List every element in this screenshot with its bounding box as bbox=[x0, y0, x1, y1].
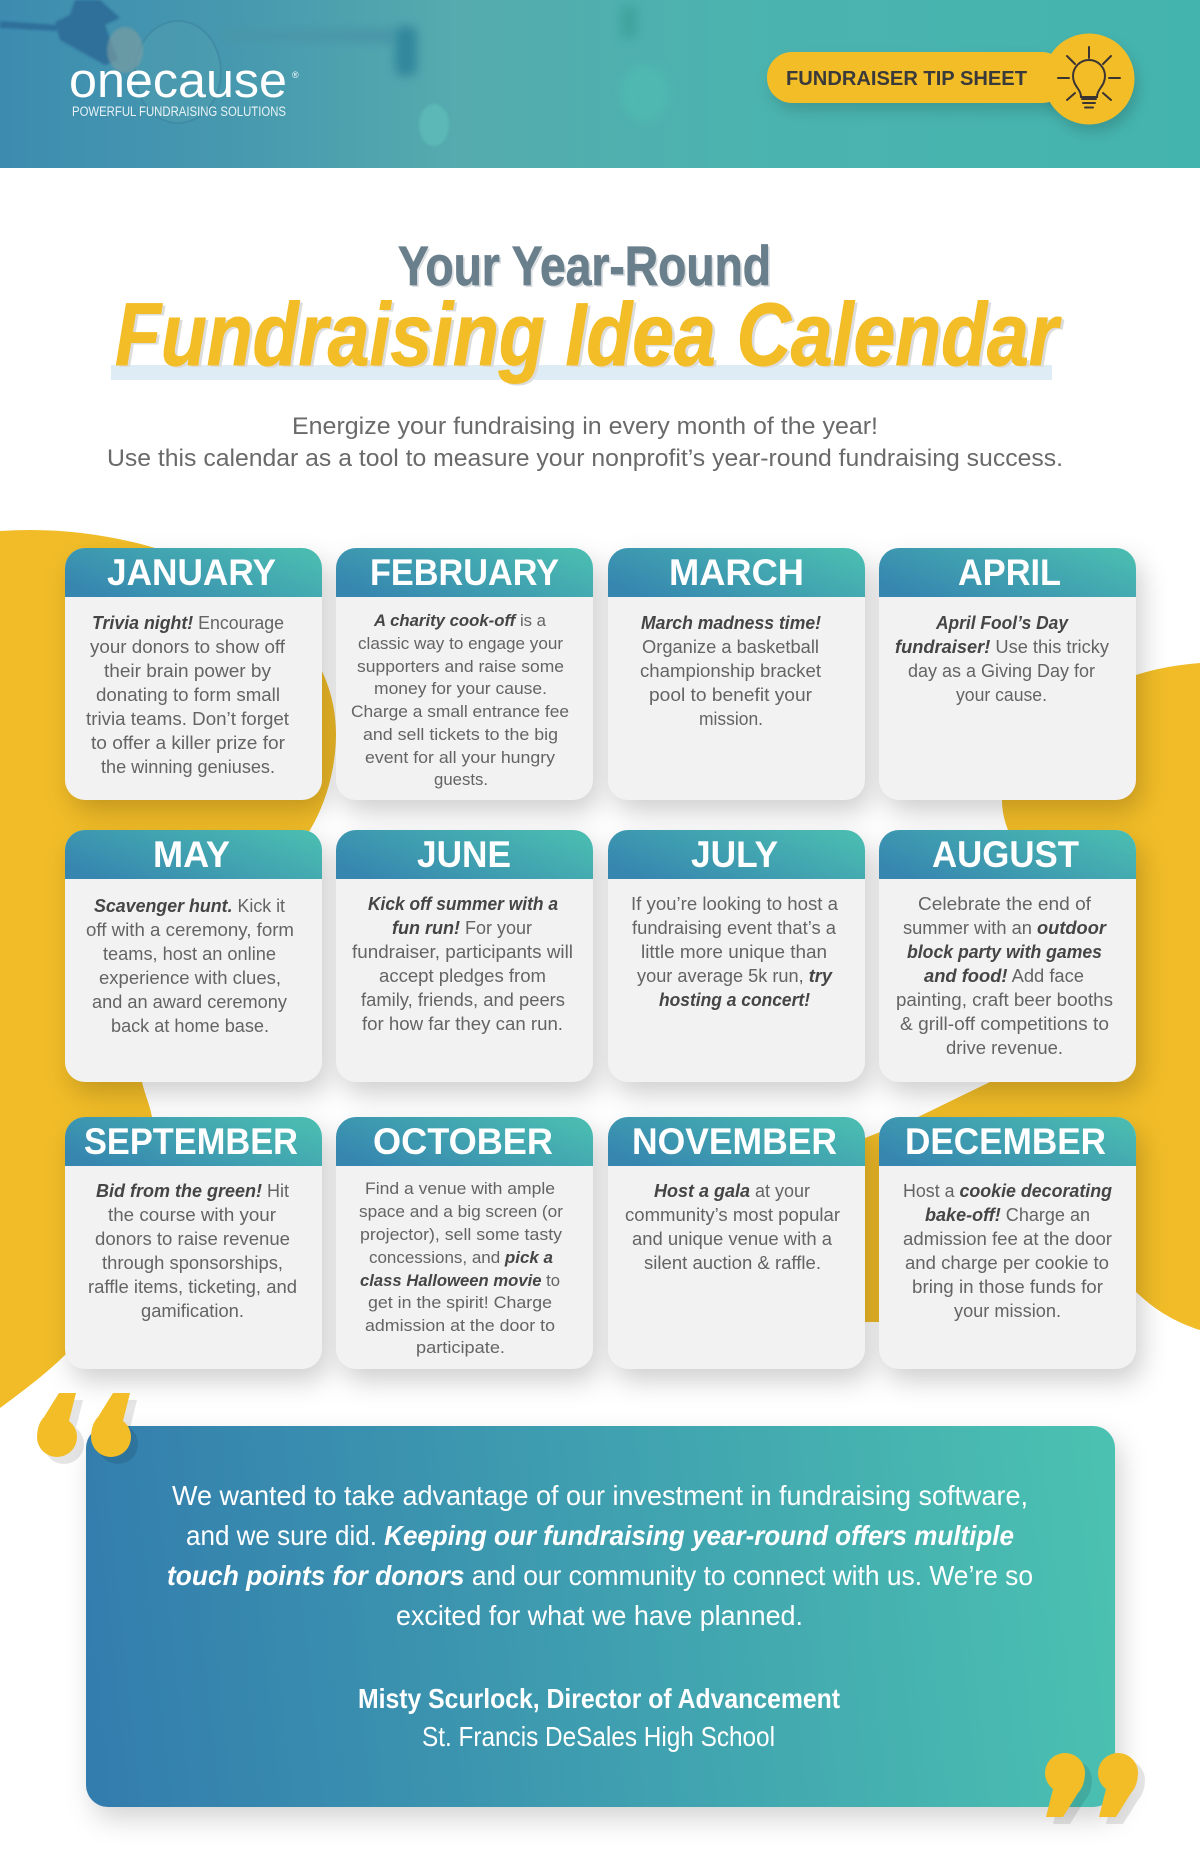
text: October idea: projector), sell some tasty bbox=[360, 1225, 563, 1244]
text: February idea bbox=[351, 611, 569, 789]
text: October idea: admission at the door to bbox=[365, 1316, 555, 1335]
quote body: touch points for donors and our community to connect with us. We’re so bbox=[167, 1560, 1033, 1591]
text: August idea: block party with games bbox=[907, 942, 1102, 962]
text: August idea: drive revenue. bbox=[946, 1038, 1063, 1058]
text: August idea: summer with an outdoor bbox=[903, 918, 1107, 938]
text: August idea bbox=[896, 894, 1113, 1058]
intro text bbox=[107, 413, 1063, 472]
text: March idea: championship bracket bbox=[640, 661, 821, 681]
text: October idea bbox=[359, 1179, 563, 1357]
text: December idea: and charge per cookie to bbox=[905, 1253, 1109, 1273]
month header: August bbox=[879, 830, 1136, 879]
month header: July bbox=[608, 830, 865, 879]
icon: opening quote marks bbox=[37, 1393, 138, 1464]
text: January idea: their brain power by bbox=[104, 661, 271, 681]
text: March idea: March madness time! bbox=[641, 613, 821, 633]
month header: December: DECEMBER bbox=[905, 1121, 1106, 1162]
quote body bbox=[167, 1480, 1033, 1631]
text: October idea: Find a venue with ample bbox=[365, 1179, 555, 1198]
text: February idea: money for your cause. bbox=[374, 679, 547, 698]
text: February idea: A charity cook-off is a bbox=[373, 611, 547, 630]
text: June idea: fun run! For your bbox=[392, 918, 532, 938]
text: October idea: class Halloween movie to bbox=[360, 1271, 560, 1290]
text: January idea: donating to form small bbox=[96, 685, 280, 705]
month header: February: FEBRUARY bbox=[370, 552, 559, 593]
text: September idea: Bid from the green! Hit bbox=[96, 1181, 289, 1201]
text: December idea: bake-off! Charge an bbox=[925, 1205, 1090, 1225]
text: January idea: the winning geniuses. bbox=[101, 757, 275, 777]
panel: September bbox=[65, 1117, 322, 1369]
text: October idea: get in the spirit! Charge bbox=[368, 1293, 552, 1312]
panel: August bbox=[879, 830, 1136, 1082]
text: January idea: Trivia night! Encourage bbox=[92, 613, 284, 633]
month header: November: NOVEMBER bbox=[632, 1121, 837, 1162]
quote body: excited for what we have planned. bbox=[396, 1600, 803, 1631]
text: September idea: gamification. bbox=[141, 1301, 244, 1321]
month header: January: JANUARY bbox=[107, 552, 276, 593]
panel: January bbox=[65, 548, 322, 800]
text: April idea: fundraiser! Use this tricky bbox=[895, 637, 1109, 657]
month header: January bbox=[65, 548, 322, 597]
text: May idea: off with a ceremony, form bbox=[86, 920, 294, 940]
month header: May bbox=[65, 830, 322, 879]
text: January idea: your donors to show off bbox=[90, 637, 286, 657]
text: September idea: through sponsorships, bbox=[102, 1253, 283, 1273]
text: January idea: trivia teams. Don’t forget bbox=[86, 709, 289, 729]
text: October idea: participate. bbox=[416, 1338, 505, 1357]
quote body: We wanted to take advantage of our investment in fundraising software, bbox=[172, 1480, 1028, 1511]
text: April idea bbox=[895, 613, 1109, 705]
text: April idea: April Fool’s Day bbox=[935, 613, 1069, 633]
header banner bbox=[0, 0, 1200, 168]
text: July idea: If you’re looking to host a bbox=[631, 894, 839, 914]
text: April idea: day as a Giving Day for bbox=[908, 661, 1095, 681]
text: August idea: and food! Add face bbox=[924, 966, 1084, 986]
month header: June bbox=[336, 830, 593, 879]
text: December idea: bring in those funds for bbox=[912, 1277, 1103, 1297]
text: March idea: mission. bbox=[699, 709, 763, 729]
text: June idea: for how far they can run. bbox=[362, 1014, 563, 1034]
title: your year-round: Your Year-Round bbox=[400, 236, 773, 299]
text: November idea: Host a gala at your bbox=[654, 1181, 810, 1201]
text: November idea: and unique venue with a bbox=[632, 1229, 833, 1249]
title: fundraising idea calendar: Fundraising Idea Calendar bbox=[115, 284, 1062, 384]
month header: July: JULY bbox=[691, 834, 778, 875]
month header: May: MAY bbox=[153, 834, 230, 875]
attribution bbox=[358, 1683, 840, 1752]
title: your year-round: Your Year-Round bbox=[398, 234, 771, 297]
text: May idea bbox=[86, 896, 294, 1036]
text: June idea bbox=[352, 894, 573, 1034]
text: September idea: the course with your bbox=[108, 1205, 276, 1225]
panel: July bbox=[608, 830, 865, 1082]
month header: June: JUNE bbox=[417, 834, 511, 875]
text: February idea: guests. bbox=[434, 770, 488, 789]
panel: February bbox=[336, 548, 593, 800]
panel: June bbox=[336, 830, 593, 1082]
background shape: left yellow blob bbox=[0, 530, 336, 1408]
text: November idea: community’s most popular bbox=[625, 1205, 840, 1225]
intro text: Energize your fundraising in every month of the year! bbox=[292, 413, 878, 440]
icon: closing quote marks bbox=[1045, 1753, 1145, 1824]
badge: fundraiser tip sheet: FUNDRAISER TIP SHEET bbox=[786, 67, 1027, 90]
logo: onecause: POWERFUL FUNDRAISING SOLUTIONS bbox=[72, 104, 286, 119]
text: July idea bbox=[631, 894, 839, 1010]
icon: light bulb bbox=[1058, 47, 1120, 108]
text: January idea: to offer a killer prize for bbox=[91, 733, 285, 753]
attribution: St. Francis DeSales High School bbox=[422, 1721, 775, 1752]
text: November idea: silent auction & raffle. bbox=[644, 1253, 821, 1273]
text: May idea: Scavenger hunt. Kick it bbox=[94, 896, 285, 916]
text: February idea: event for all your hungry bbox=[365, 748, 556, 767]
month header: February bbox=[336, 548, 593, 597]
text: May idea: experience with clues, bbox=[99, 968, 281, 988]
panel: December bbox=[879, 1117, 1136, 1369]
text: February idea: classic way to engage your bbox=[358, 634, 563, 653]
text: June idea: Kick off summer with a bbox=[368, 894, 558, 914]
panel: May bbox=[65, 830, 322, 1082]
month header: September: SEPTEMBER bbox=[84, 1121, 298, 1162]
panel: April bbox=[879, 548, 1136, 800]
text: July idea: your average 5k run, try bbox=[637, 966, 833, 986]
month header: August: AUGUST bbox=[932, 834, 1079, 875]
text: December idea: Host a cookie decorating bbox=[903, 1181, 1112, 1201]
text: June idea: family, friends, and peers bbox=[361, 990, 565, 1010]
panel: March bbox=[608, 548, 865, 800]
text: November idea bbox=[625, 1181, 840, 1273]
text: May idea: teams, host an online bbox=[103, 944, 276, 964]
intro text: Use this calendar as a tool to measure your nonprofit’s year-round fundraising success. bbox=[107, 445, 1063, 472]
text: March idea bbox=[640, 613, 821, 729]
text: September idea bbox=[88, 1181, 297, 1321]
text: August idea: painting, craft beer booths bbox=[896, 990, 1113, 1010]
text: June idea: accept pledges from bbox=[379, 966, 546, 986]
month header: March: MARCH bbox=[669, 552, 804, 593]
text: July idea: hosting a concert! bbox=[659, 990, 810, 1010]
panel: testimonial quote bbox=[86, 1426, 1121, 1819]
month header: October bbox=[336, 1117, 593, 1166]
month header: April: APRIL bbox=[958, 552, 1061, 593]
panel: November bbox=[608, 1117, 865, 1369]
text: February idea: Charge a small entrance fee bbox=[351, 702, 569, 721]
text: May idea: and an award ceremony bbox=[92, 992, 287, 1012]
text: October idea: space and a big screen (or bbox=[359, 1202, 563, 1221]
attribution: Misty Scurlock, Director of Advancement bbox=[358, 1683, 840, 1714]
logo: onecause: ® bbox=[292, 70, 299, 80]
text: March idea: Organize a basketball bbox=[642, 637, 819, 657]
text: February idea: supporters and raise some bbox=[357, 657, 564, 676]
text: August idea: & grill-off competitions to bbox=[900, 1014, 1109, 1034]
month header: March bbox=[608, 548, 865, 597]
text: August idea: Celebrate the end of bbox=[918, 894, 1092, 914]
background shape: right yellow blob bbox=[865, 663, 1200, 1330]
panel: October bbox=[336, 1117, 593, 1369]
month header: October: OCTOBER bbox=[373, 1121, 553, 1162]
text: April idea: your cause. bbox=[956, 685, 1047, 705]
text: May idea: back at home base. bbox=[111, 1016, 269, 1036]
text: September idea: donors to raise revenue bbox=[95, 1229, 290, 1249]
text: December idea: your mission. bbox=[954, 1301, 1061, 1321]
text: January idea bbox=[86, 613, 289, 777]
text: June idea: fundraiser, participants will bbox=[352, 942, 573, 962]
text: December idea bbox=[903, 1181, 1112, 1321]
text: February idea: and sell tickets to the big bbox=[363, 725, 558, 744]
month header: November bbox=[608, 1117, 865, 1166]
text: July idea: little more unique than bbox=[641, 942, 827, 962]
month header: December bbox=[879, 1117, 1136, 1166]
badge: fundraiser tip sheet bbox=[767, 34, 1138, 132]
month header: April bbox=[879, 548, 1136, 597]
text: October idea: concessions, and pick a bbox=[369, 1248, 553, 1267]
text: March idea: pool to benefit your bbox=[649, 685, 812, 705]
logo: onecause: onecause bbox=[69, 54, 287, 108]
text: July idea: fundraising event that’s a bbox=[632, 918, 837, 938]
text: December idea: admission fee at the door bbox=[903, 1229, 1112, 1249]
quote body: and we sure did. Keeping our fundraising year-round offers multiple bbox=[186, 1520, 1014, 1551]
text: September idea: raffle items, ticketing, and bbox=[88, 1277, 297, 1297]
